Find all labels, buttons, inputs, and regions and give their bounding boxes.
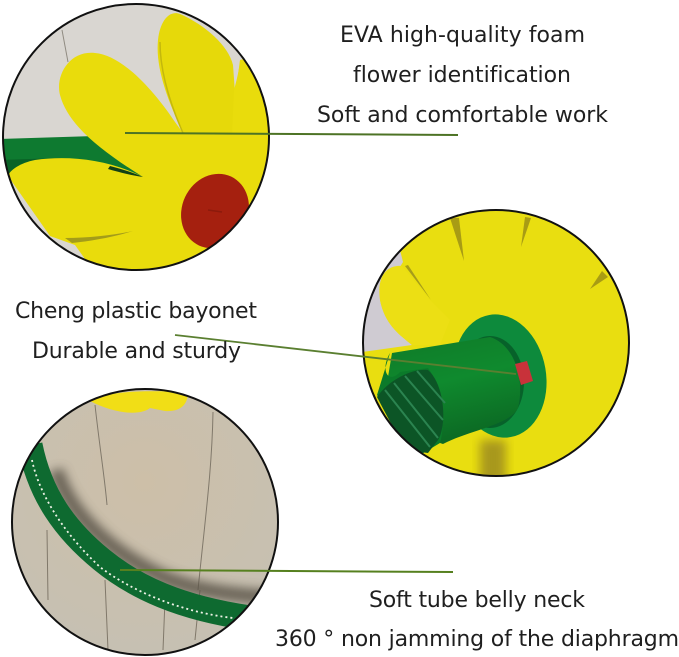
yellow flower body [9, 52, 268, 269]
leader line: soft tube [120, 570, 453, 572]
text block: foam flower description: EVA high-quality foam [340, 23, 585, 48]
text block: foam flower description [317, 23, 608, 128]
cone opening [377, 353, 443, 455]
wood grain [47, 405, 213, 650]
soft shadow stripe [480, 440, 506, 485]
green flange [458, 314, 547, 438]
icon: red button [181, 174, 249, 248]
text block: soft tube description: Soft tube belly neck [369, 588, 585, 613]
tube behind petals [4, 136, 143, 177]
panel: plastic bayonet close-up circle [360, 208, 632, 485]
petal slits [65, 231, 133, 243]
tube shadow [56, 470, 285, 598]
icon: red clip [515, 361, 533, 385]
text block: soft tube description [275, 588, 679, 652]
text block: bayonet description: Cheng plastic bayonet [15, 299, 257, 324]
corrugated hose [377, 370, 445, 453]
petal slits [405, 265, 431, 300]
grey backdrop at left [364, 252, 412, 352]
panel: soft tube close-up circle [10, 388, 285, 656]
text block: foam flower description: flower identification [353, 63, 571, 88]
green cone [385, 337, 520, 444]
top petal [158, 13, 238, 135]
icon: yellow petals [90, 391, 188, 413]
text block: bayonet description: Durable and sturdy [32, 339, 241, 364]
text block: bayonet description [15, 299, 257, 364]
text block: soft tube description: 360 ° non jamming of the diaphragm [275, 627, 679, 652]
panel: foam flower close-up circle [0, 0, 280, 280]
leader line: bayonet [175, 335, 516, 374]
text block: foam flower description: Soft and comfortable work [317, 103, 608, 128]
green tube [30, 445, 250, 618]
leader line: foam flower [125, 133, 458, 135]
